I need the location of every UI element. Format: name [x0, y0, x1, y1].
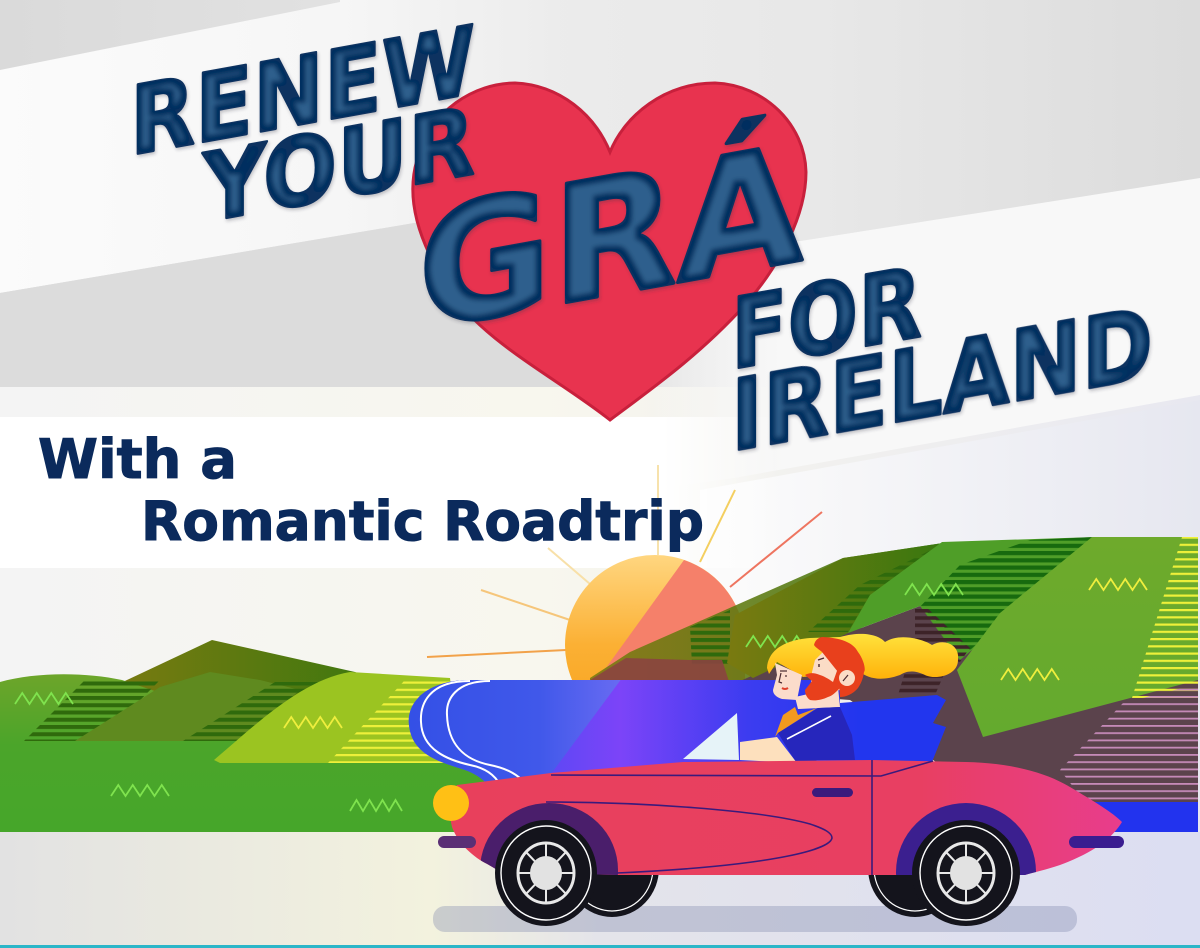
sun salmon wedge: [590, 560, 745, 690]
man's ear: [839, 670, 855, 686]
road: [0, 832, 1200, 948]
river right deep section: [409, 680, 946, 800]
driver's arm: [740, 737, 797, 763]
front wheel left: [495, 820, 597, 926]
front wheel right: [912, 820, 1020, 926]
title lettering: [130, 5, 1153, 475]
big green hill: [957, 537, 1198, 737]
lime front hill: [214, 672, 460, 763]
shirt stripe: [787, 716, 831, 739]
sun disc: [565, 555, 745, 735]
background: left diagonal white band: [0, 0, 560, 293]
background: subtitle white band: [0, 417, 780, 568]
maroon hatching on moor: [915, 606, 970, 662]
couple in the car: [740, 634, 958, 769]
background: lower pale sky: [0, 387, 1200, 837]
background: right diagonal white band: [650, 178, 1200, 490]
yellow stripes on big hill: [1132, 537, 1198, 698]
red convertible car: [433, 760, 1124, 941]
background: upper grey sky: [0, 0, 1200, 388]
blue river: [409, 680, 946, 800]
dark hatching on olive hill: [690, 610, 730, 665]
river white curves: [421, 681, 522, 785]
title: FOR: FOR: [731, 246, 922, 393]
rear wheel right: [868, 819, 962, 917]
title: GRÁ: GRÁ: [418, 108, 803, 368]
dark hatching on mid hill: [915, 537, 1095, 650]
yellow stripes on lime hill: [328, 680, 450, 763]
car body: [450, 760, 1122, 875]
subtitle line 2: Romantic Roadtrip: [141, 490, 704, 553]
subtitle line 1: With a: [38, 428, 237, 491]
woman's ponytail hair: [767, 634, 958, 679]
background: grey panel under left band: [0, 215, 800, 388]
background: top right light panel: [340, 0, 1200, 245]
zigzag grass marks: [15, 579, 1147, 811]
heart: [413, 83, 806, 420]
left arch: [480, 803, 618, 875]
sun rays: [427, 465, 822, 657]
woman's features: [779, 671, 788, 689]
right page edge: [1198, 537, 1200, 832]
man's hair: [814, 637, 865, 697]
pink stripes on moor: [1060, 684, 1198, 802]
sun with rays: [427, 465, 822, 735]
title: IRELAND: IRELAND: [731, 286, 1153, 475]
man's blue shirt: [778, 707, 855, 769]
far left rolling green: [0, 674, 540, 832]
man's eye and brow: [818, 658, 824, 667]
title: RENEW: RENEW: [130, 5, 475, 178]
dark hatching left: [24, 680, 160, 741]
title: YOUR: YOUR: [202, 85, 475, 245]
olive hill over sun: [590, 543, 943, 682]
dark hatching right: [183, 682, 320, 741]
wheel arches: [480, 803, 1036, 875]
headlight: [433, 785, 469, 821]
background: right pale panel: [700, 400, 1200, 620]
man's face: [810, 650, 845, 695]
door handle: [812, 788, 853, 797]
blue stream at right: [1085, 802, 1200, 832]
dark hatching between olive and mid hill: [808, 548, 943, 632]
dark olive hill: [110, 640, 400, 740]
subtitle: [38, 428, 704, 553]
car shadow: [433, 906, 1077, 932]
left bumper: [438, 836, 476, 848]
man's beard: [805, 668, 840, 700]
right bumper: [1069, 836, 1124, 848]
left hills landscape: [0, 640, 540, 832]
mid olive hill: [75, 672, 300, 741]
river left lighter section: [408, 680, 620, 782]
brown moor hill: [720, 606, 1200, 802]
man's ear detail: [843, 675, 848, 681]
bottom teal edge: [0, 945, 1200, 948]
woman's face: [773, 663, 802, 700]
maroon hatching under hair: [898, 672, 945, 695]
woman's orange shirt: [775, 707, 817, 737]
rear wheel left: [565, 819, 659, 917]
body trim lines: [546, 760, 933, 875]
maroon ground under olive hill: [590, 658, 735, 700]
mid green hill: [848, 537, 1095, 660]
right hills landscape: [590, 537, 1200, 832]
olive front hill: [727, 543, 943, 678]
right arch: [896, 803, 1036, 875]
man's neck: [795, 687, 840, 709]
windshield: [683, 713, 739, 760]
